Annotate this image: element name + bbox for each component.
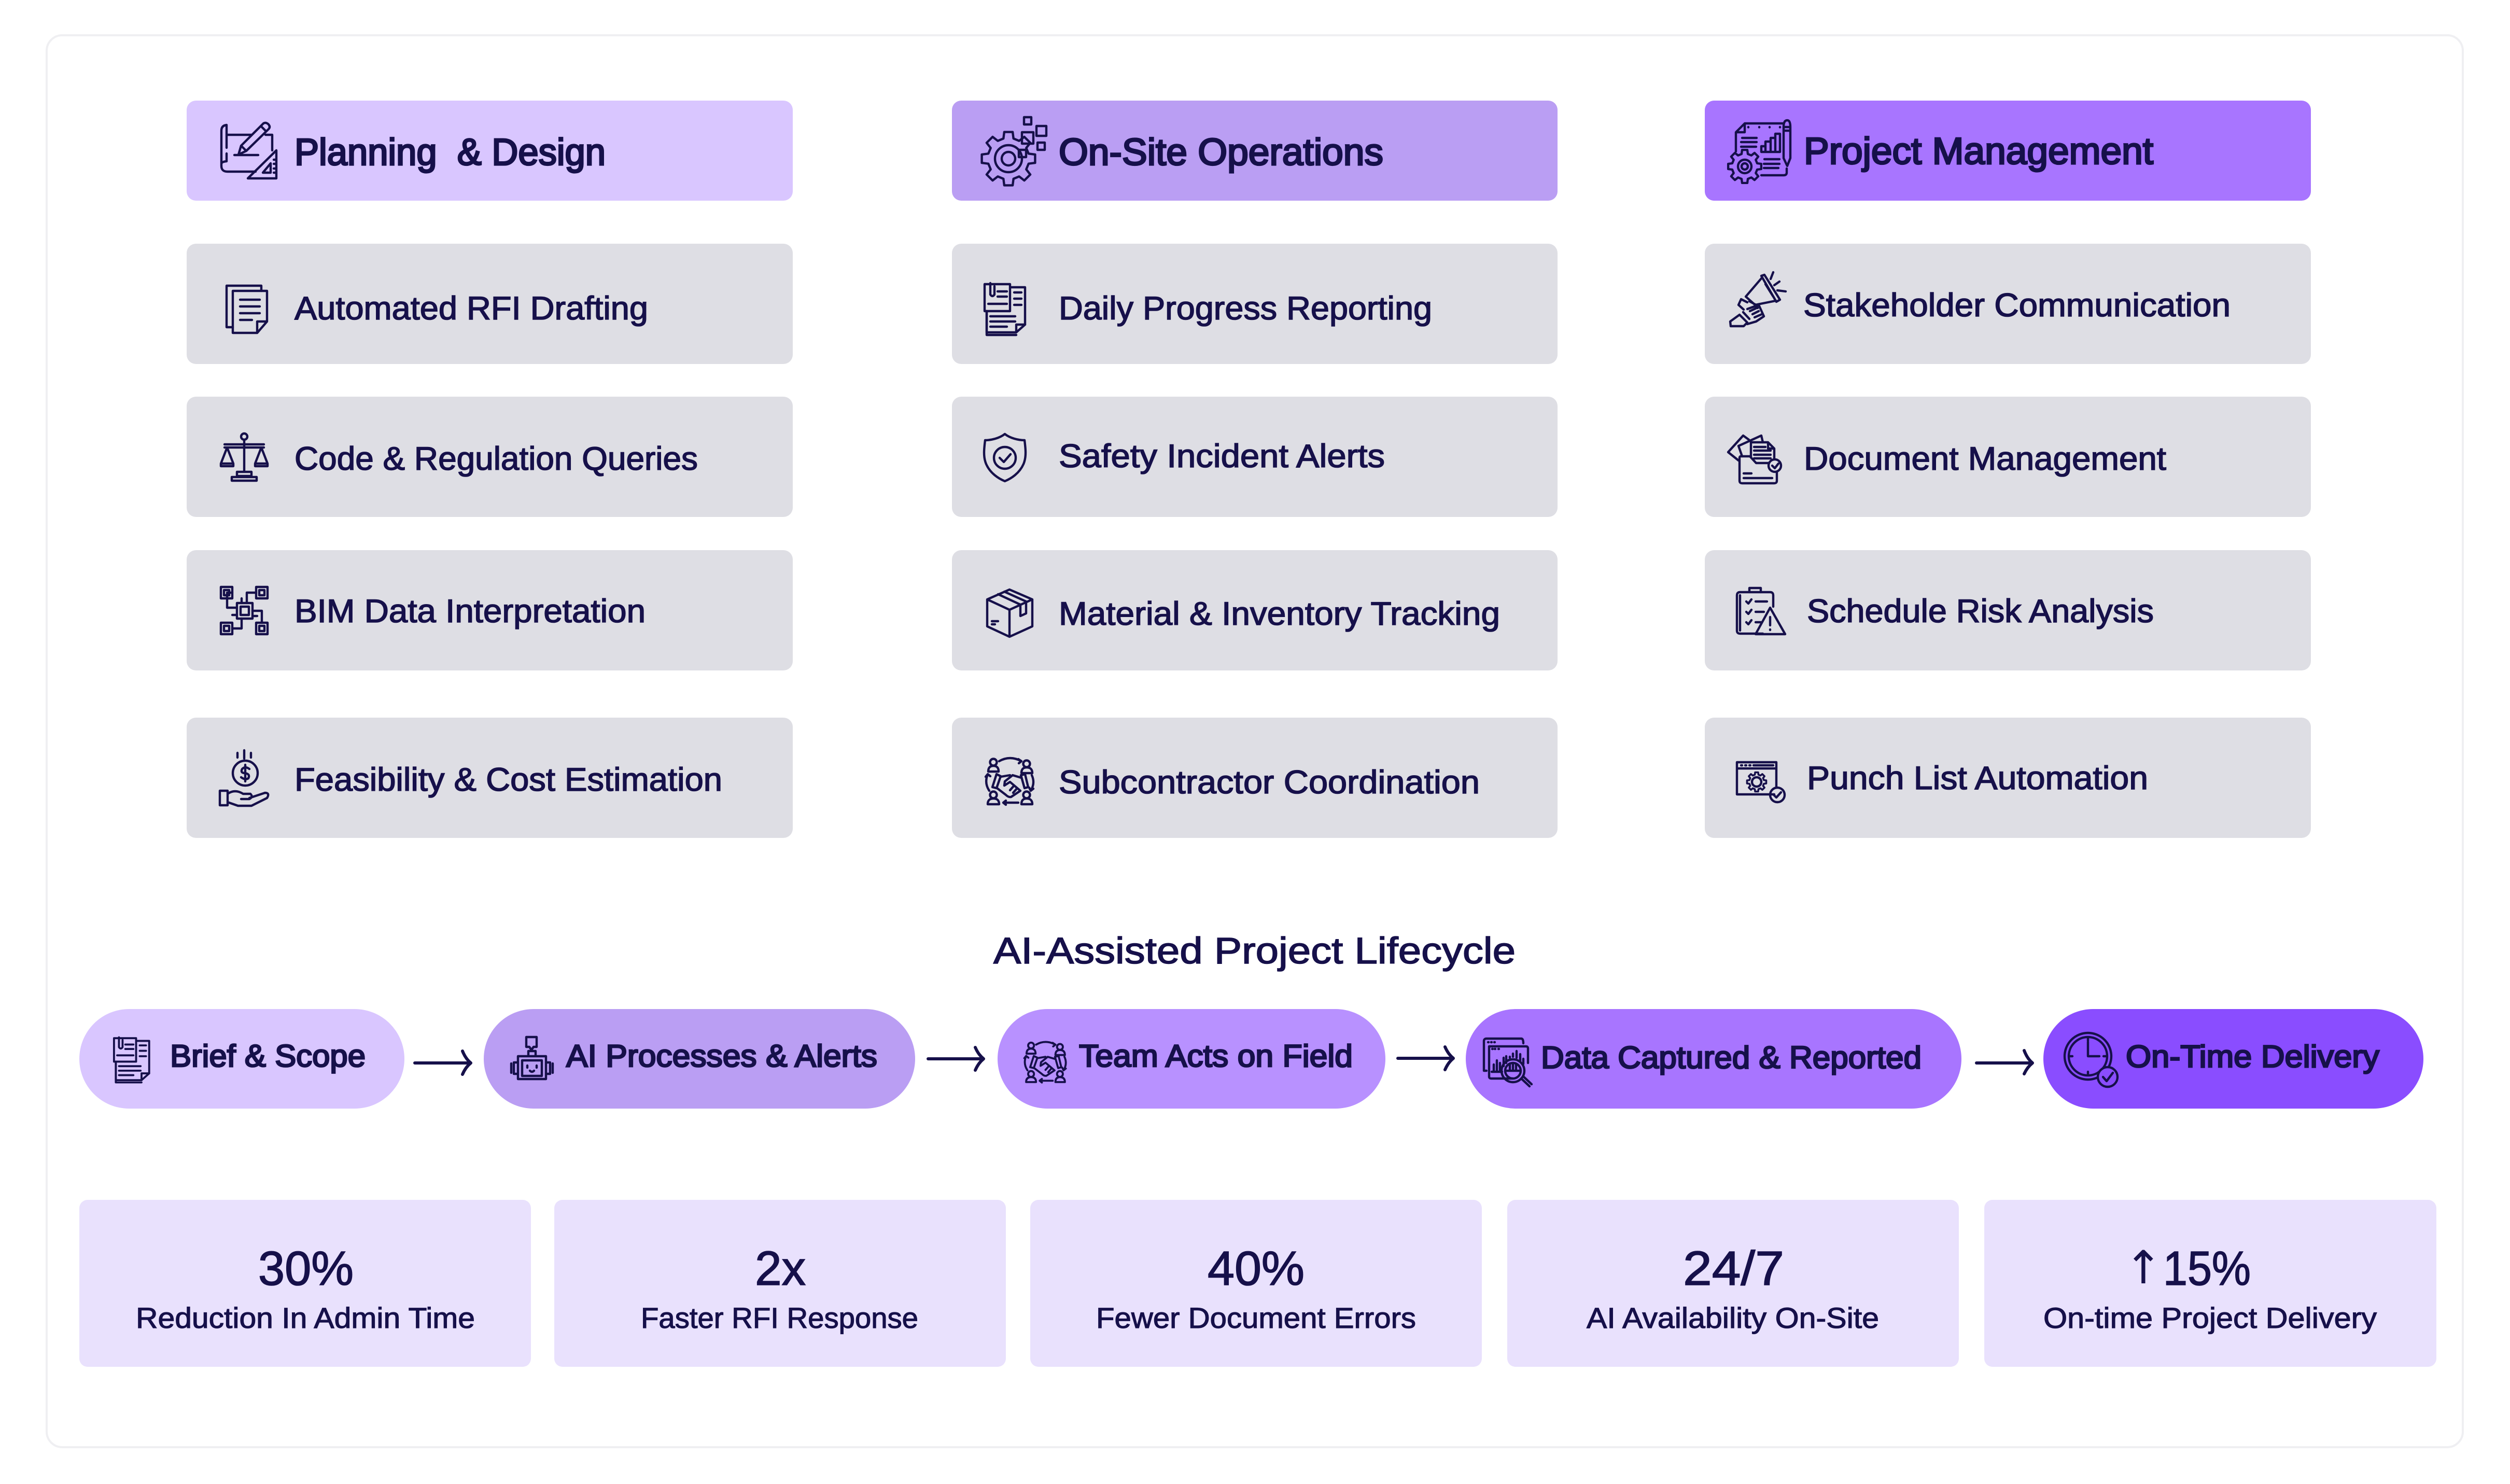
heading: On-Site Operations [952, 101, 1558, 201]
icon: team handshake [986, 758, 1033, 805]
card: Automated RFI Drafting [187, 244, 793, 364]
icon: robot [511, 1037, 553, 1079]
value: 15% [2163, 1241, 2251, 1295]
statistics row [79, 1200, 2436, 1367]
lifecycle flow [79, 1009, 2423, 1109]
card: Document Management [1705, 397, 2311, 517]
icon: project plan with gear [1728, 120, 1790, 183]
card: BIM Data Interpretation [187, 550, 793, 670]
card: Stakeholder Communication [1705, 244, 2311, 364]
heading: AI-Assisted Project Lifecycle: AI-Assisted Project Lifecycle [993, 931, 1516, 972]
label: On-Site Operations [1059, 132, 1383, 173]
icon: gear with pixels [982, 117, 1046, 185]
label: Automated RFI Drafting [295, 290, 648, 327]
card: Daily Progress Reporting [952, 244, 1558, 364]
icon: clock with check [2065, 1033, 2118, 1087]
label: BIM Data Interpretation [295, 593, 646, 629]
icon: checklist with warning [1737, 588, 1785, 634]
value: 30% [258, 1241, 354, 1295]
label: Daily Progress Reporting [1059, 290, 1432, 327]
stat: 40% [1030, 1200, 1482, 1367]
label: Planning & Design [295, 132, 606, 173]
icon: data windows with magnifier [1484, 1039, 1532, 1086]
label: On-Time Delivery [2126, 1039, 2379, 1074]
arrow [1976, 1051, 2032, 1074]
label: AI Availability On-Site [1587, 1301, 1879, 1334]
label: Subcontractor Coordination [1059, 764, 1480, 801]
label: Fewer Document Errors [1096, 1301, 1416, 1334]
step: Data Captured & Reported [1466, 1009, 1961, 1109]
label: Data Captured & Reported [1541, 1040, 1922, 1075]
icon: folder with documents [1728, 436, 1781, 483]
icon: report pages [985, 283, 1025, 335]
card: Subcontractor Coordination [952, 718, 1558, 838]
label: Brief & Scope [170, 1039, 366, 1073]
icon: blueprint with pencil and set square [221, 123, 276, 178]
icon: circuit nodes [221, 587, 268, 634]
value: 24/7 [1683, 1241, 1784, 1295]
label: Document Management [1804, 441, 2167, 477]
heading: Planning & Design [187, 101, 793, 201]
stat: 24/7 [1507, 1200, 1959, 1367]
arrow [1398, 1047, 1453, 1070]
label: Faster RFI Response [641, 1301, 918, 1334]
label: Team Acts on Field [1079, 1039, 1353, 1073]
value: ↑ [2124, 1241, 2163, 1294]
card: Punch List Automation [1705, 718, 2311, 838]
step: AI Processes & Alerts [484, 1009, 915, 1109]
icon: package box [987, 590, 1032, 637]
icon: megaphone [1730, 272, 1786, 326]
label: Punch List Automation [1807, 760, 2148, 796]
label: Stakeholder Communication [1803, 287, 2231, 324]
label: Reduction In Admin Time [136, 1301, 475, 1334]
icon: hand with coin [220, 750, 268, 806]
icon: documents [227, 286, 267, 333]
icon: scales [221, 433, 268, 481]
card: Schedule Risk Analysis [1705, 550, 2311, 670]
value [2124, 1241, 2251, 1295]
card: Material & Inventory Tracking [952, 550, 1558, 670]
label: Schedule Risk Analysis [1807, 593, 2154, 629]
label: Code & Regulation Queries [295, 441, 698, 477]
step: On-Time Delivery [2043, 1009, 2423, 1109]
arrow [415, 1051, 471, 1074]
label: On-time Project Delivery [2043, 1301, 2377, 1334]
label: Project Management [1804, 131, 2153, 172]
label: Material & Inventory Tracking [1059, 596, 1500, 632]
icon: shield check [984, 434, 1026, 481]
value: 40% [1208, 1241, 1305, 1295]
label: Safety Incident Alerts [1059, 438, 1385, 474]
heading: Project Management [1705, 101, 2311, 201]
step: Team Acts on Field [998, 1009, 1385, 1109]
arrow [928, 1047, 984, 1070]
label: AI Processes & Alerts [566, 1039, 877, 1073]
panel: On-Site Operations column [952, 101, 1558, 838]
icon: browser with gear and check [1737, 762, 1785, 802]
card: Feasibility & Cost Estimation [187, 718, 793, 838]
card: Code & Regulation Queries [187, 397, 793, 517]
stat: 2x [554, 1200, 1006, 1367]
stat: up 15% [1984, 1200, 2436, 1367]
panel: Project Management column [1705, 101, 2311, 838]
label: Feasibility & Cost Estimation [295, 762, 722, 798]
card: Safety Incident Alerts [952, 397, 1558, 517]
value: 2x [755, 1241, 806, 1295]
panel: Planning & Design column [187, 101, 793, 838]
step: Brief & Scope [79, 1009, 404, 1109]
stat: 30% [79, 1200, 531, 1367]
icon: report pages [114, 1037, 149, 1082]
icon: team handshake [1025, 1042, 1066, 1083]
